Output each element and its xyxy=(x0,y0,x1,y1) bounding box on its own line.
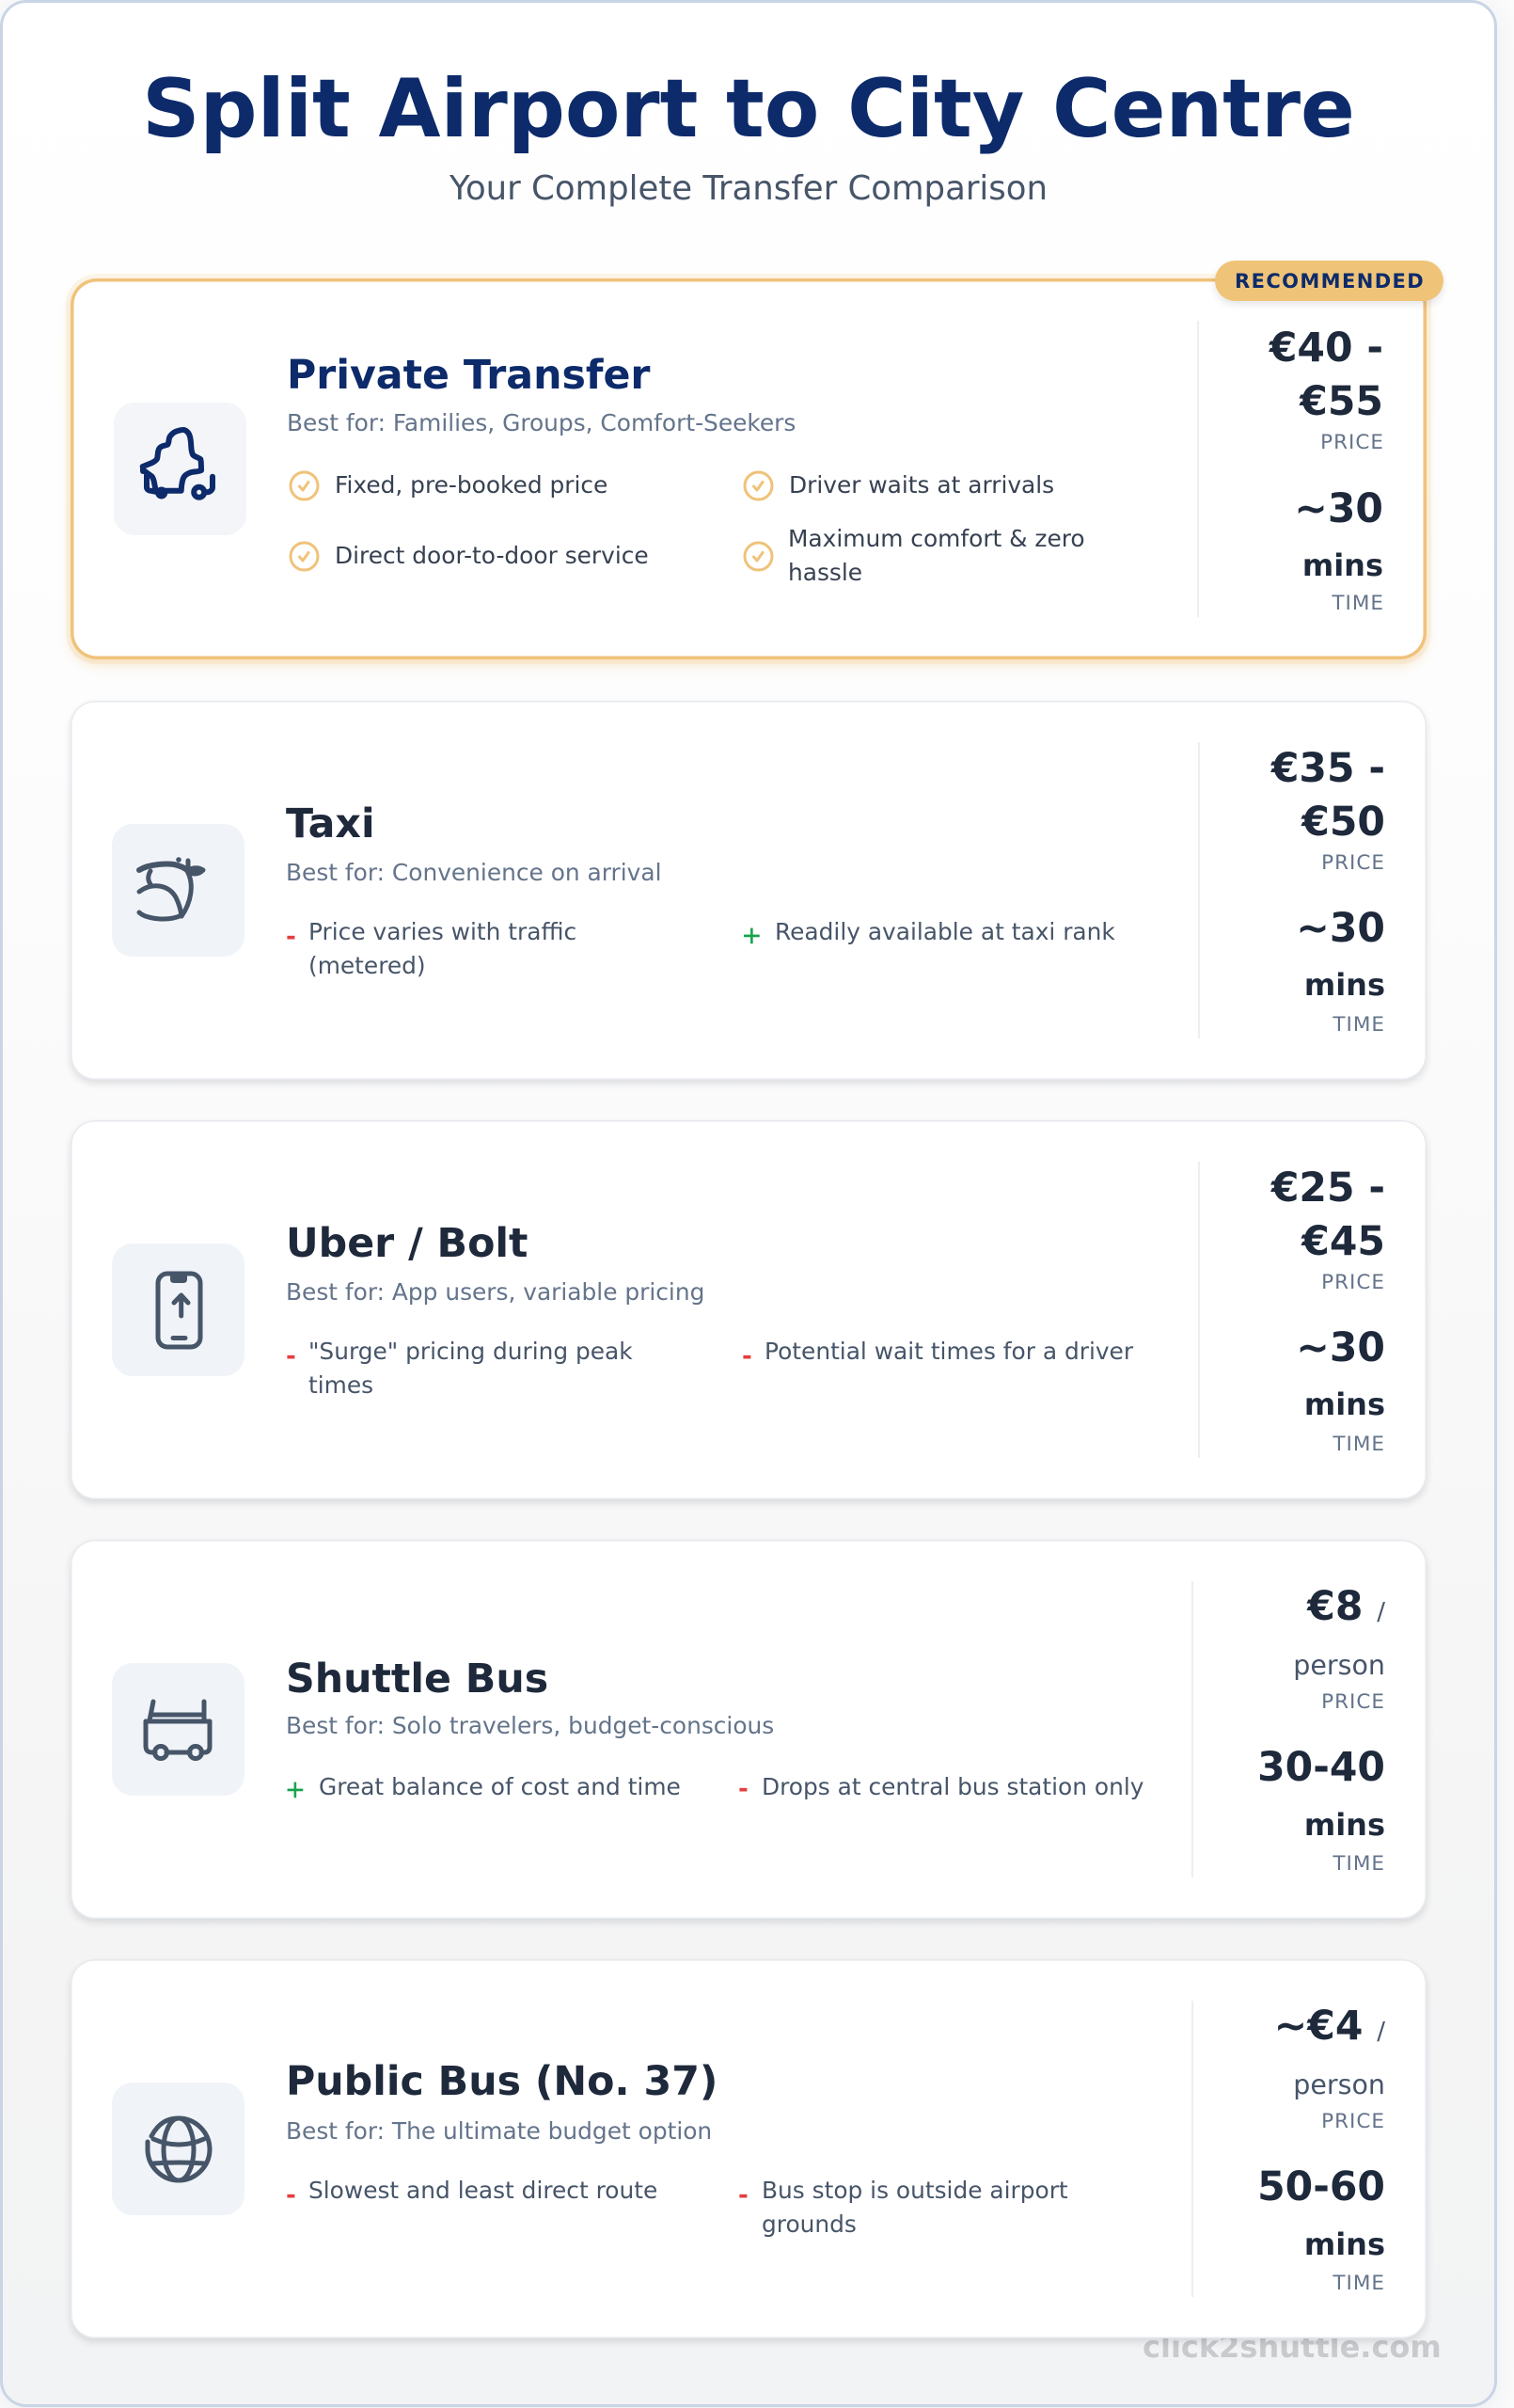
badge: recommended: RECOMMENDED xyxy=(1235,269,1425,292)
name: Private Transfer xyxy=(287,352,650,399)
price label: PRICE xyxy=(1321,2110,1385,2133)
marker: minus: - xyxy=(286,923,296,951)
marker: minus: - xyxy=(742,1342,752,1370)
price value: €55 xyxy=(1300,378,1383,425)
feature: maximum comfort: hassle xyxy=(788,559,862,585)
feature: fixed price: Fixed, pre-booked price xyxy=(335,471,607,499)
time unit: mins xyxy=(1304,967,1385,1003)
feature: maximum comfort: Maximum comfort & zero xyxy=(788,525,1085,551)
best for: Best for: Families, Groups, Comfort-Seekers xyxy=(287,409,796,436)
price unit: person xyxy=(1293,1650,1385,1681)
time value: ~30 xyxy=(1296,906,1385,952)
price value: €45 xyxy=(1301,1219,1385,1264)
price value xyxy=(1270,746,1385,845)
best for: Best for: Solo travelers, budget-conscious xyxy=(286,1712,774,1739)
feature: surge pricing xyxy=(308,1338,633,1399)
price label: PRICE xyxy=(1320,431,1384,453)
panel: taxi xyxy=(71,701,1427,1080)
feature: bus stop outside: grounds xyxy=(762,2210,857,2238)
price unit: person xyxy=(1293,2069,1385,2100)
marker: plus: + xyxy=(285,1776,306,1804)
price value: €25 - xyxy=(1271,1165,1385,1212)
best for: Best for: App users, variable pricing xyxy=(286,1277,704,1306)
time label: TIME xyxy=(1333,1433,1385,1456)
time unit: mins xyxy=(1304,1806,1385,1842)
feature: bus stop outside: Bus stop is outside airport xyxy=(762,2177,1068,2204)
price value: €40 - xyxy=(1270,325,1383,372)
price label: PRICE xyxy=(1321,851,1385,875)
price label: PRICE xyxy=(1321,1690,1385,1714)
time value: ~30 xyxy=(1294,486,1383,532)
time label: TIME xyxy=(1333,1852,1385,1876)
divider xyxy=(1198,742,1200,1038)
divider xyxy=(1198,1162,1200,1458)
check: door to door xyxy=(290,542,320,572)
marker: minus: - xyxy=(286,2181,296,2210)
feature: driver waits: Driver waits at arrivals xyxy=(789,471,1054,499)
name: Uber / Bolt xyxy=(286,1220,528,1267)
marker: minus: - xyxy=(738,1775,749,1803)
price value: €8 / xyxy=(1307,1584,1385,1630)
icon: phone xyxy=(112,1244,244,1376)
panel: uber / bolt xyxy=(71,1120,1427,1499)
name: Taxi xyxy=(286,800,375,848)
best for: Best for: Convenience on arrival xyxy=(286,858,662,886)
icon: globe xyxy=(112,2083,244,2215)
price label: PRICE xyxy=(1321,1271,1385,1294)
check: maximum comfort xyxy=(743,542,773,572)
time value: ~30 xyxy=(1296,1325,1385,1371)
feature: price varies: (metered) xyxy=(308,952,426,979)
time value: 50-60 xyxy=(1257,2164,1385,2210)
marker: minus: - xyxy=(738,2181,749,2210)
feature: readily available: Readily available at taxi rank xyxy=(775,918,1115,945)
price value: ~€4 / xyxy=(1274,2004,1385,2050)
feature: bus stop outside xyxy=(762,2177,1068,2238)
feature: door to door: Direct door-to-door service xyxy=(335,542,649,568)
check: fixed price xyxy=(290,470,320,500)
time label: TIME xyxy=(1333,1013,1385,1037)
icon: taxi xyxy=(112,824,244,957)
feature: wait times: Potential wait times for a driver xyxy=(765,1338,1133,1365)
feature: surge pricing: times xyxy=(308,1371,373,1399)
price value: €50 xyxy=(1301,800,1385,845)
name: Public Bus (No. 37) xyxy=(286,2058,718,2105)
panel: shuttle bus xyxy=(71,1540,1427,1919)
feature: great balance: Great balance of cost and time xyxy=(319,1772,681,1800)
divider xyxy=(1191,2001,1193,2297)
time unit: mins xyxy=(1304,1386,1385,1422)
price value xyxy=(1269,325,1383,425)
badge: recommended xyxy=(1215,261,1443,301)
divider xyxy=(1197,321,1199,617)
price value xyxy=(1270,1165,1385,1264)
icon: private transfer car xyxy=(114,403,246,535)
watermark: click2shuttle.com: click2shuttle.com xyxy=(1143,2329,1442,2365)
feature: slowest route: Slowest and least direct route xyxy=(308,2177,657,2204)
panel: public bus xyxy=(71,1959,1427,2338)
icon: shuttle xyxy=(112,1663,244,1796)
feature: maximum comfort xyxy=(788,525,1085,585)
feature: price varies xyxy=(308,918,576,979)
feature: price varies: Price varies with traffic xyxy=(308,918,576,945)
name: Shuttle Bus xyxy=(286,1656,548,1703)
feature: central bus station: Drops at central bus station only xyxy=(762,1772,1143,1800)
price value: €35 - xyxy=(1271,746,1385,792)
title: Split Airport to City Centre xyxy=(142,63,1355,156)
divider xyxy=(1191,1581,1193,1877)
time value: 30-40 xyxy=(1257,1745,1385,1791)
feature: surge pricing: "Surge" pricing during peak xyxy=(308,1338,633,1365)
time label: TIME xyxy=(1333,2272,1385,2295)
time unit: mins xyxy=(1302,547,1383,583)
time unit: mins xyxy=(1304,2226,1385,2261)
panel: private transfer xyxy=(71,278,1427,659)
subtitle: Your Complete Transfer Comparison xyxy=(449,169,1048,208)
best for: Best for: The ultimate budget option xyxy=(286,2116,712,2145)
marker: plus: + xyxy=(741,922,762,950)
time label: TIME xyxy=(1332,592,1384,615)
check: driver waits xyxy=(743,470,773,500)
marker: minus: - xyxy=(286,1342,296,1370)
